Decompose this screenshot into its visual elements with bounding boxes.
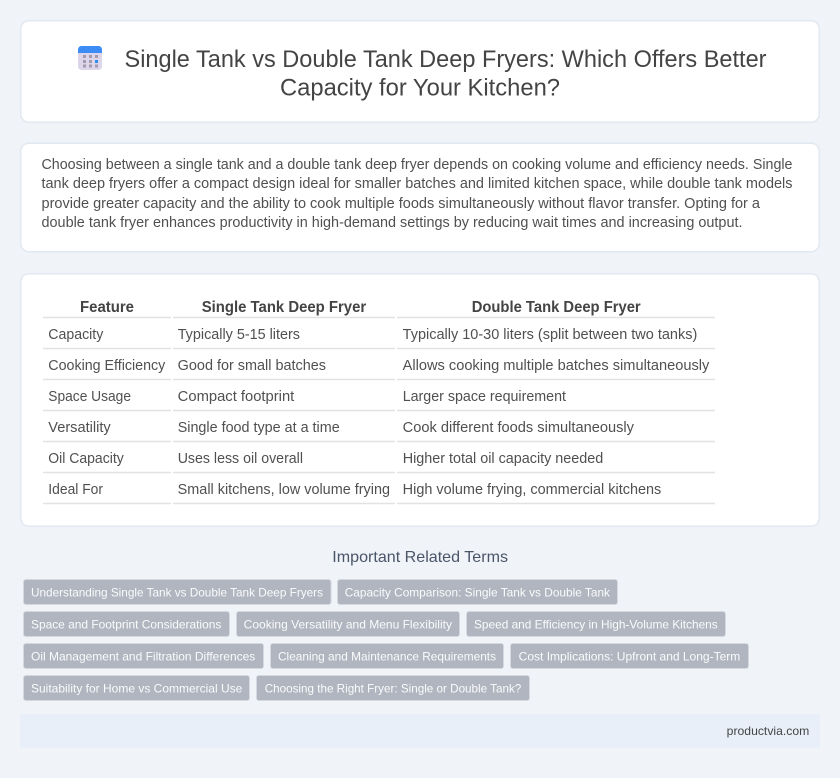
table row: capacity: Capacity xyxy=(48,327,104,343)
tag: understanding xyxy=(24,580,331,604)
text block: introduction: tank deep fryers offer a compact design ideal for smaller batches and limited kitchen space, while double tank models xyxy=(42,176,792,192)
tag: cleaning and maintenance xyxy=(270,644,504,668)
tag: choosing the right fryer: Choosing the Right Fryer: Single or Double Tank? xyxy=(265,682,522,696)
tag: suitability xyxy=(24,676,250,700)
table header row xyxy=(43,299,715,318)
table row: ideal for: Ideal For xyxy=(48,482,103,498)
table row: space usage: Space Usage xyxy=(48,389,131,405)
table row: versatility: Single food type at a time xyxy=(178,420,340,436)
table row: cooking efficiency: Allows cooking multiple batches simultaneously xyxy=(403,358,710,374)
tag: cleaning and maintenance: Cleaning and Maintenance Requirements xyxy=(278,650,496,664)
related term tags xyxy=(24,580,748,700)
table row: ideal for xyxy=(43,482,715,504)
tag: cooking versatility xyxy=(236,612,460,636)
panel: header xyxy=(21,21,819,122)
tag: speed and efficiency: Speed and Efficiency in High-Volume Kitchens xyxy=(474,618,718,632)
tag: speed and efficiency xyxy=(466,612,726,636)
table row: versatility xyxy=(43,420,715,442)
icon: calendar xyxy=(78,46,102,70)
text block: introduction: double tank fryer enhances productivity in high-demand settings by reducing wait times and increasing output. xyxy=(42,215,742,231)
tag: cost implications: Cost Implications: Upfront and Long-Term xyxy=(519,650,740,664)
tag: cooking versatility: Cooking Versatility and Menu Flexibility xyxy=(244,618,452,632)
panel: comparison table xyxy=(21,274,819,526)
table header row: Double Tank Deep Fryer xyxy=(472,299,641,316)
tag: understanding: Understanding Single Tank vs Double Tank Deep Fryers xyxy=(31,586,323,600)
panel: introduction xyxy=(21,143,819,252)
tag: capacity comparison xyxy=(338,580,618,604)
title: Single Tank vs Double Tank Deep Fryers: Which Offers Better xyxy=(124,46,767,73)
table row: cooking efficiency: Cooking Efficiency xyxy=(48,358,166,374)
table row: oil capacity xyxy=(43,451,715,472)
tag: capacity comparison: Capacity Comparison: Single Tank vs Double Tank xyxy=(345,586,611,600)
tag: cost implications xyxy=(510,644,748,668)
text block: introduction: Choosing between a single tank and a double tank deep fryer depends on cooking volume and efficiency needs. Single xyxy=(42,157,792,173)
table row: oil capacity: Uses less oil overall xyxy=(178,451,303,467)
title xyxy=(124,46,767,102)
table row: space usage xyxy=(43,389,715,410)
tag: oil management xyxy=(24,644,264,668)
footer bar xyxy=(20,714,820,748)
table row: capacity: Typically 5-15 liters xyxy=(178,327,300,343)
heading: important related terms: Important Related Terms xyxy=(332,549,508,566)
tag: space and footprint: Space and Footprint Considerations xyxy=(31,618,221,632)
table row: capacity: Typically 10-30 liters (split between two tanks) xyxy=(403,327,697,343)
tag: suitability: Suitability for Home vs Commercial Use xyxy=(31,682,243,696)
table header row: Single Tank Deep Fryer xyxy=(202,299,366,316)
table row: space usage: Larger space requirement xyxy=(403,389,566,405)
table row: versatility: Versatility xyxy=(48,420,112,436)
tag: space and footprint xyxy=(24,612,230,636)
table row: oil capacity: Oil Capacity xyxy=(48,451,124,467)
tag: oil management: Oil Management and Filtration Differences xyxy=(31,650,255,664)
tag: choosing the right fryer xyxy=(256,676,530,700)
text block: introduction: provide greater capacity and the ability to cook multiple foods simultaneously without flavor transfer. Opting for a xyxy=(42,196,760,212)
table row: ideal for: High volume frying, commercial kitchens xyxy=(403,482,661,498)
title: Capacity for Your Kitchen? xyxy=(280,74,560,102)
table row: versatility: Cook different foods simultaneously xyxy=(403,420,635,436)
table row: ideal for: Small kitchens, low volume frying xyxy=(178,482,390,498)
table row: cooking efficiency xyxy=(43,358,715,380)
table header row: Feature xyxy=(80,299,134,316)
table row: space usage: Compact footprint xyxy=(178,389,294,405)
text block: introduction xyxy=(42,157,792,231)
table row: capacity xyxy=(43,327,715,348)
footer source: productvia.com xyxy=(727,724,809,738)
table row: oil capacity: Higher total oil capacity needed xyxy=(403,451,603,467)
table row: cooking efficiency: Good for small batches xyxy=(178,358,326,374)
